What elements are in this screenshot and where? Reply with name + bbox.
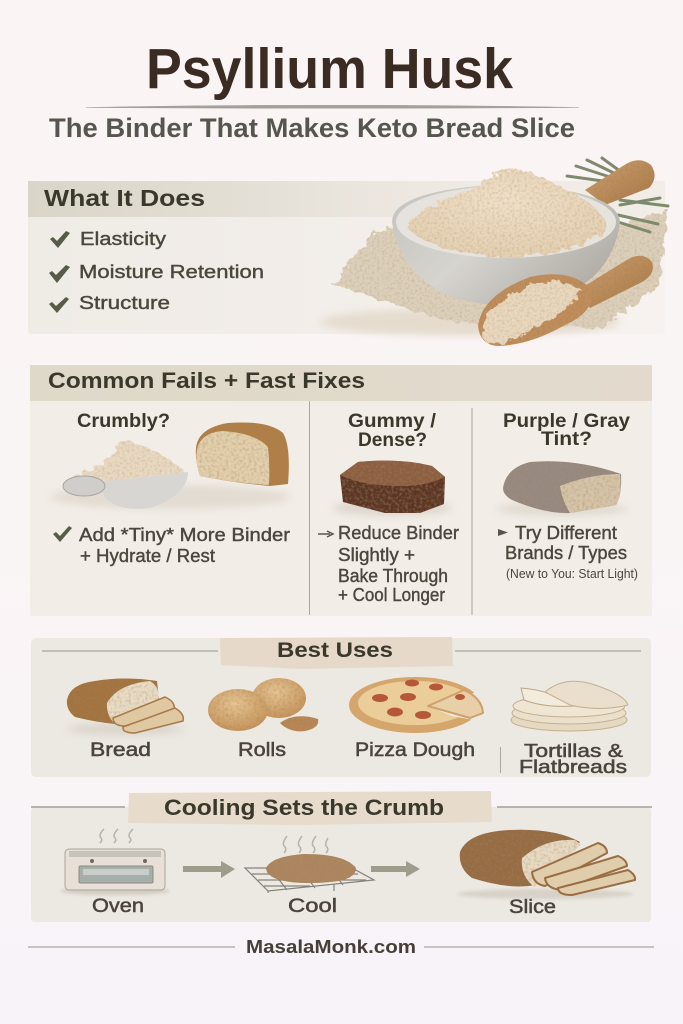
cooling rack <box>245 868 374 893</box>
illustration: psyllium bowl and scoops <box>320 158 668 346</box>
fix text: Slightly + <box>338 544 415 565</box>
arrow <box>183 861 235 878</box>
panel: cooling sets the crumb <box>31 791 652 922</box>
title divider <box>86 105 579 108</box>
heading: common fails: Common Fails + Fast Fixes <box>48 368 365 393</box>
column: gummy <box>318 411 459 605</box>
heading: tint: Tint? <box>541 429 592 450</box>
fix text: + Cool Longer <box>338 584 445 605</box>
label: rolls: Rolls <box>238 740 286 761</box>
text: moisture retention: Moisture Retention <box>79 261 264 282</box>
illustration: crumbly bowl and bread <box>50 422 290 509</box>
heading: what it does: What It Does <box>44 185 205 211</box>
powder mound <box>407 170 606 258</box>
heading: purple gray: Purple / Gray <box>503 411 630 432</box>
fix text: Try Different <box>515 522 617 543</box>
use: rolls <box>208 678 318 731</box>
bowl rim <box>396 186 616 258</box>
scattered husk <box>320 308 620 336</box>
header rules <box>42 650 641 652</box>
step: cool <box>245 836 374 893</box>
text: elasticity: Elasticity <box>80 228 167 249</box>
label: cool: Cool <box>288 896 337 917</box>
steam <box>283 836 328 853</box>
icon: check <box>50 231 70 248</box>
label: oven: Oven <box>92 896 144 917</box>
icon: arrow <box>318 531 333 537</box>
label: flatbreads: Flatbreads <box>519 757 627 777</box>
column: purple gray tint <box>496 411 638 581</box>
title: Psyllium Husk <box>146 37 513 101</box>
panel: what it does <box>28 181 665 334</box>
panel: common fails and fast fixes <box>30 365 652 616</box>
heading: dense: Dense? <box>358 430 427 451</box>
fix text: + Hydrate / Rest <box>80 545 215 566</box>
arrow <box>371 861 420 877</box>
text: structure: Structure <box>79 292 170 313</box>
heading: best uses: Best Uses <box>277 639 393 662</box>
back scoop handle <box>585 160 655 205</box>
icon: check <box>53 526 72 542</box>
steam <box>100 829 133 843</box>
use: tortillas <box>511 681 628 731</box>
label: pizza dough: Pizza Dough <box>355 740 475 761</box>
column: crumbly <box>50 411 290 566</box>
fix text: Reduce Binder <box>338 522 459 543</box>
step: slice <box>457 830 635 899</box>
icon: check <box>49 297 69 313</box>
use: pizza <box>349 677 484 733</box>
header rules <box>31 806 652 808</box>
column divider <box>472 408 473 615</box>
website credit: MasalaMonk.com <box>246 937 416 957</box>
heading tag <box>128 791 492 825</box>
header band <box>30 365 652 401</box>
note: (New to You: Start Light) <box>506 567 638 581</box>
column divider <box>309 401 310 615</box>
heading tag <box>220 637 453 669</box>
divider <box>500 747 501 773</box>
fix text: Brands / Types <box>505 542 627 563</box>
fix text: Bake Through <box>338 565 448 586</box>
cooling loaf <box>266 854 356 883</box>
heading: cooling: Cooling Sets the Crumb <box>164 795 444 820</box>
subtitle: The Binder That Makes Keto Bread Slice <box>49 113 575 143</box>
bowl <box>392 184 620 306</box>
icon: pointer <box>498 529 508 536</box>
burlap mat <box>332 208 668 328</box>
use: bread <box>67 678 183 735</box>
benefits list <box>49 228 264 313</box>
illustration: tinted loaf <box>496 461 628 516</box>
palm leaves <box>567 158 668 232</box>
label: tortillas: Tortillas & <box>524 741 623 761</box>
icon: check <box>49 265 70 283</box>
heading: gummy: Gummy / <box>348 411 437 432</box>
header band <box>28 181 665 217</box>
panel: best uses <box>31 637 651 777</box>
label: slice: Slice <box>509 897 556 918</box>
label: bread: Bread <box>90 740 151 761</box>
fix text: Add *Tiny* More Binder <box>79 524 290 545</box>
illustration: brownie <box>332 461 452 516</box>
step: oven <box>60 829 170 895</box>
heading: crumbly: Crumbly? <box>77 411 170 432</box>
front scoop <box>478 256 653 346</box>
